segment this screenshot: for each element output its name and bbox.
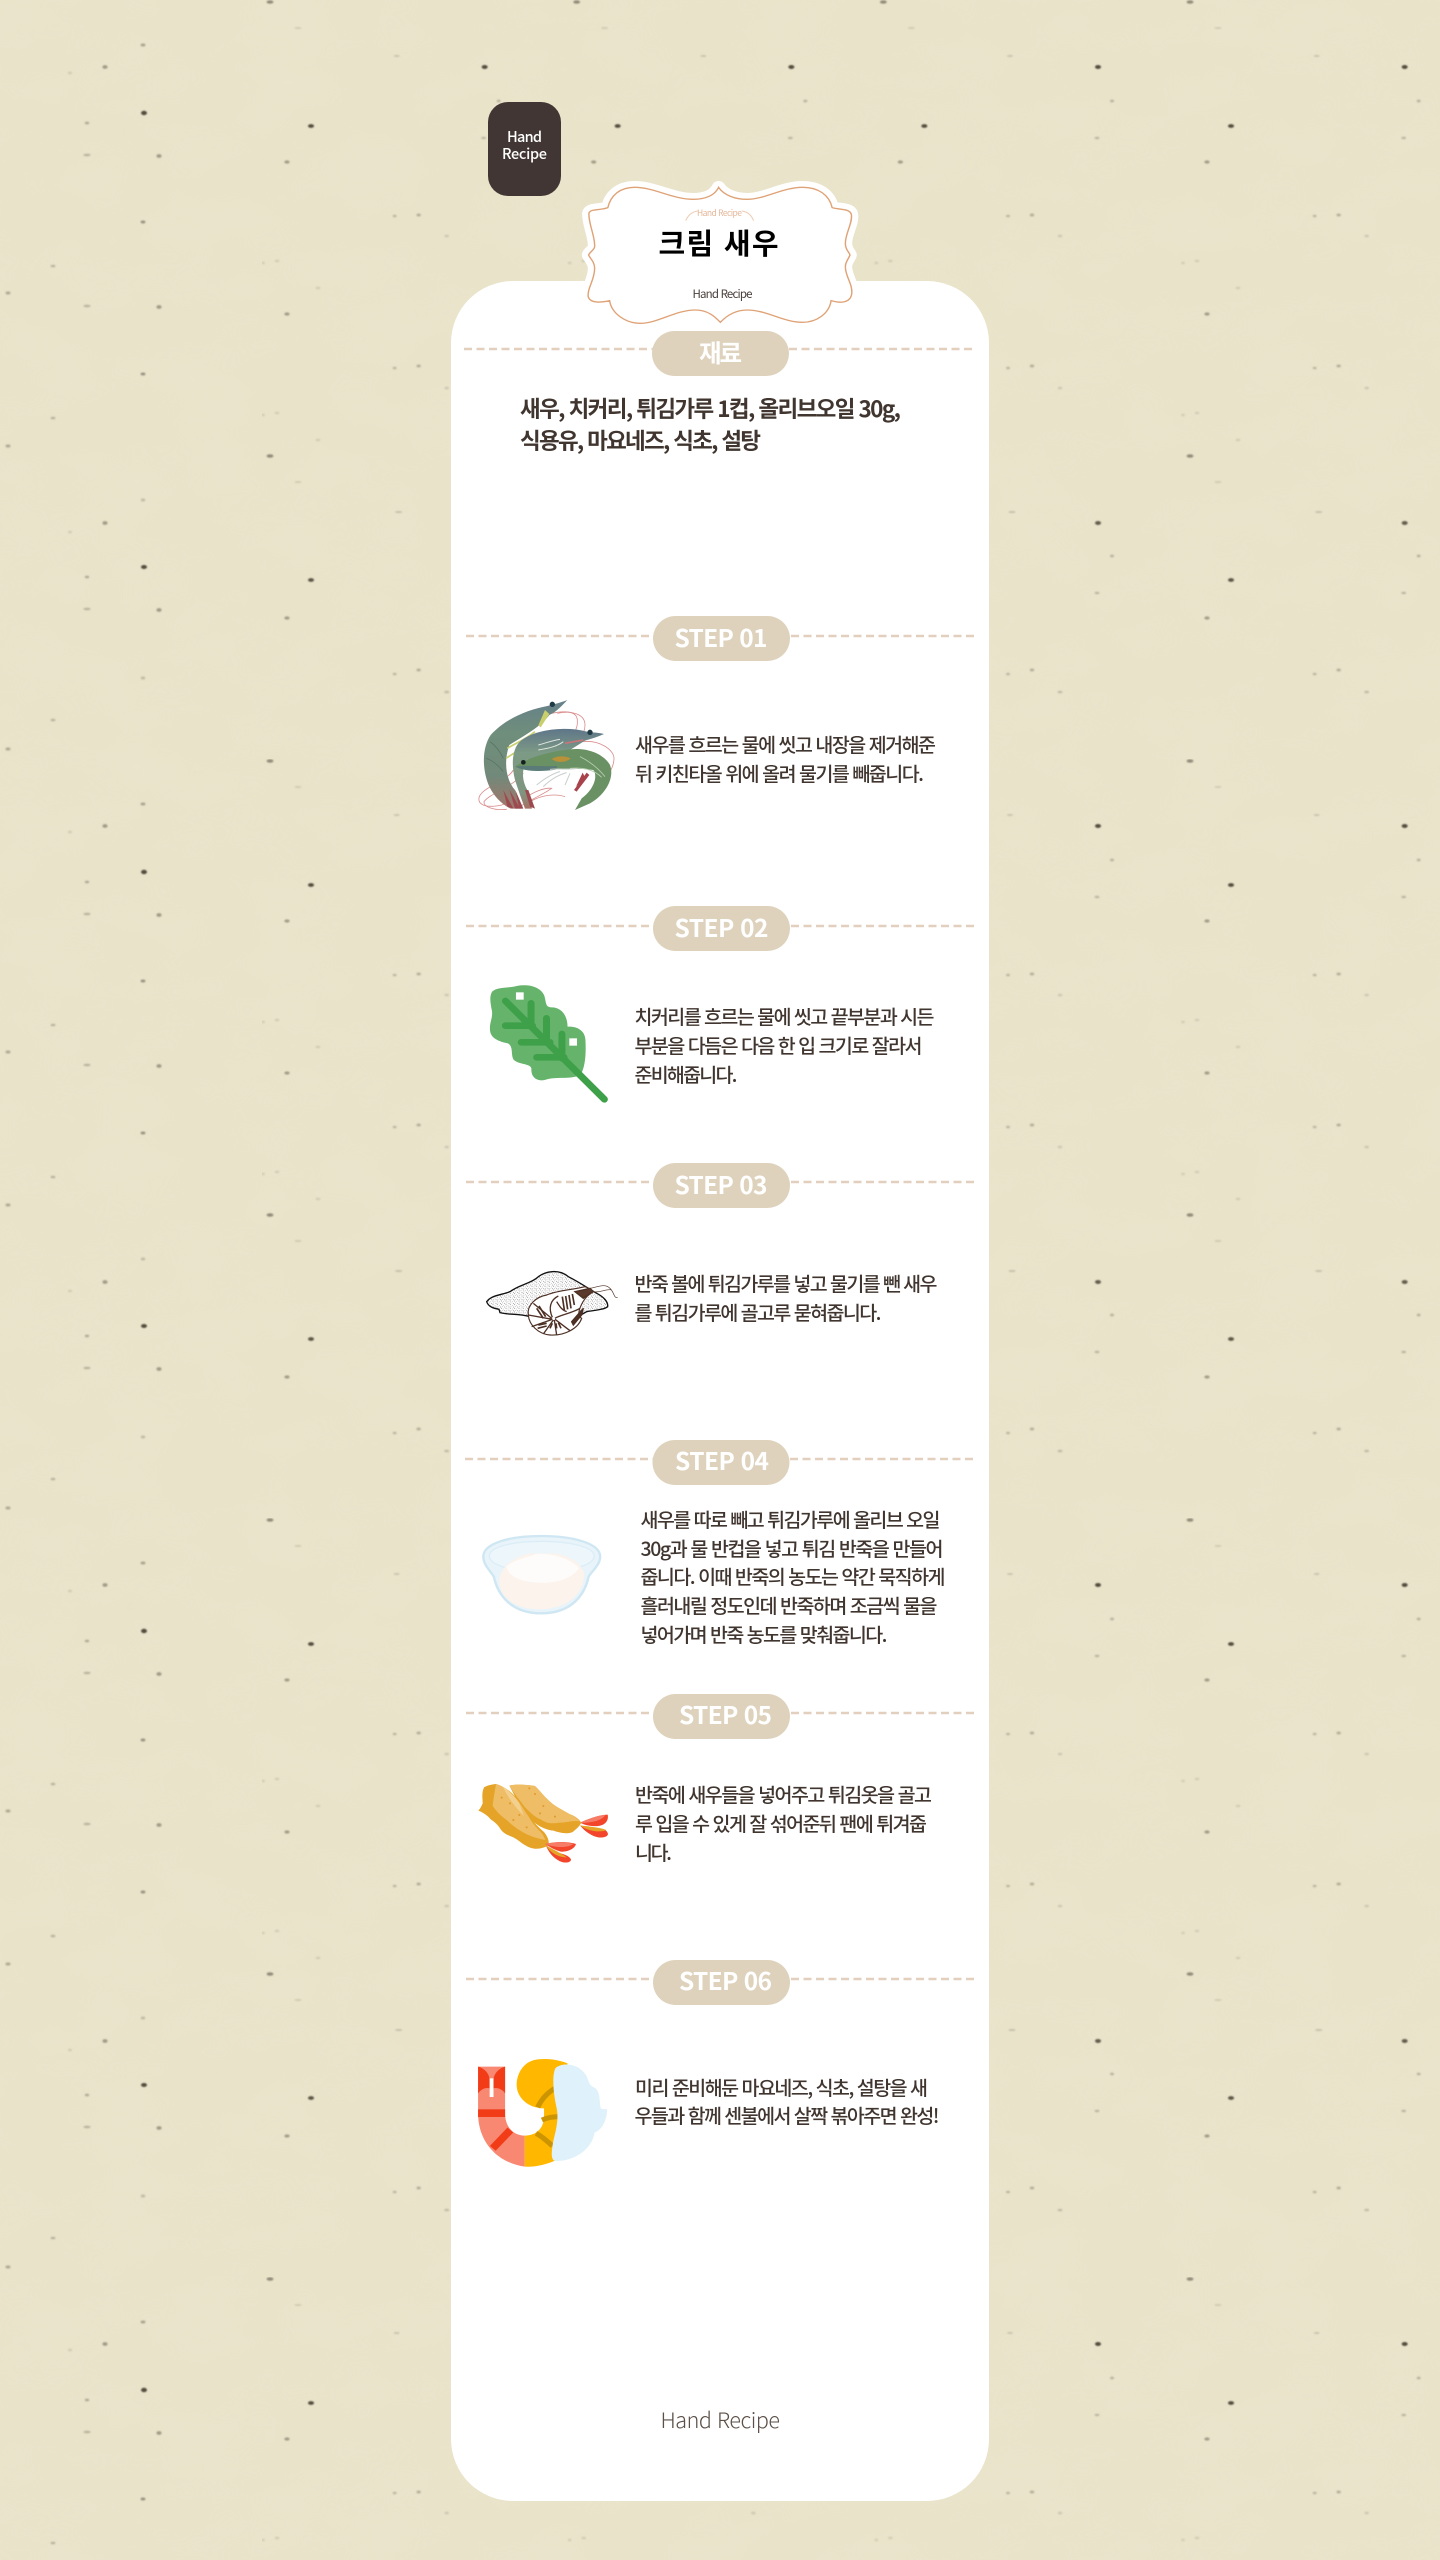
- step 02 text: [634, 1001, 935, 1088]
- step 06 text: 미리 준비해둔 마요네즈, 식초, 설탕을 새: [635, 2072, 928, 2101]
- step 02 text: 준비해줍니다.: [634, 1059, 738, 1088]
- front prawn: [515, 749, 611, 810]
- step 01 header: [466, 616, 978, 661]
- step 05 header: [466, 1694, 978, 1739]
- step 05 text: 루 입을 수 있게 잘 섞어준뒤 팬에 튀겨줍: [635, 1808, 927, 1837]
- step 04 text: 줍니다. 이때 반죽의 농도는 약간 묵직하게: [640, 1561, 946, 1590]
- icon: glass bowl of batter: [483, 1536, 600, 1613]
- icon: chicory leaf: [490, 985, 604, 1099]
- icon: shrimp dipped in mayo sauce: [478, 2059, 607, 2167]
- step 04 text: 넣어가며 반죽 농도를 맞춰줍니다.: [640, 1619, 888, 1648]
- icon: shrimp on frying flour: [487, 1272, 618, 1335]
- step 02 text: 치커리를 흐르는 물에 씻고 끝부분과 시든: [634, 1001, 935, 1030]
- title plaque: [588, 187, 852, 323]
- step 01 text: [635, 729, 936, 787]
- step 05 header: STEP 05: [679, 1697, 772, 1732]
- step 01 text: 새우를 흐르는 물에 씻고 내장을 제거해준: [635, 729, 936, 758]
- ingredients text: 식용유, 마요네즈, 식초, 설탕: [520, 424, 761, 456]
- icon: green prawns illustration: [479, 700, 614, 810]
- ingredients text: 새우, 치커리, 튀김가루 1컵, 올리브오일 30g,: [520, 392, 901, 424]
- step 02 header: STEP 02: [674, 910, 768, 945]
- plaque brand: Hand Recipe: [692, 286, 752, 302]
- step 04 header: [465, 1440, 977, 1485]
- step 02 header: [466, 906, 978, 951]
- step 05 text: 반죽에 새우들을 넣어주고 튀김옷을 골고: [635, 1779, 932, 1808]
- plaque title: 크림 새우: [658, 221, 778, 263]
- step 04 text: [640, 1504, 946, 1648]
- step 04 header: STEP 04: [675, 1443, 769, 1478]
- ingredients text: [520, 392, 901, 456]
- step 04 text: 흘러내릴 정도인데 반죽하며 조금씩 물을: [640, 1590, 938, 1619]
- step 06 header: [466, 1960, 978, 2005]
- step 06 text: 우들과 함께 센불에서 살짝 볶아주면 완성!: [634, 2100, 940, 2129]
- step 03 text: 를 튀김가루에 골고루 묻혀줍니다.: [634, 1297, 882, 1326]
- step 03 text: [634, 1268, 938, 1326]
- step 03 header: STEP 03: [674, 1167, 768, 1202]
- plaque small label: Hand Recipe: [697, 207, 742, 219]
- step 02 text: 부분을 다듬은 다음 한 입 크기로 잘라서: [634, 1030, 922, 1059]
- section header: 재료: 재료: [699, 335, 742, 370]
- step 01 text: 뒤 키친타올 위에 올려 물기를 빼줍니다.: [635, 758, 924, 787]
- step 04 text: 30g과 물 반컵을 넣고 튀김 반죽을 만들어: [640, 1533, 944, 1562]
- icon: fried shrimp: [478, 1784, 608, 1863]
- step 03 header: [466, 1163, 978, 1208]
- step 06 text: [634, 2072, 940, 2129]
- step 05 text: [635, 1779, 932, 1866]
- step 03 text: 반죽 볼에 튀김가루를 넣고 물기를 뺀 새우: [634, 1268, 938, 1297]
- footer brand: Hand Recipe: [660, 2404, 780, 2435]
- back prawn: [484, 700, 567, 809]
- badge: Hand Recipe: [488, 102, 561, 196]
- step 01 header: STEP 01: [674, 620, 768, 655]
- middle prawn: [513, 729, 604, 809]
- badge: Hand Recipe: Recipe: [502, 143, 547, 164]
- step 04 text: 새우를 따로 빼고 튀김가루에 올리브 오일: [640, 1504, 940, 1533]
- badge: Hand Recipe: Hand: [507, 126, 542, 147]
- step 06 header: STEP 06: [679, 1963, 772, 1998]
- step 05 text: 니다.: [635, 1837, 672, 1866]
- section header: 재료: [464, 331, 976, 376]
- panel: white recipe card: [451, 281, 989, 2501]
